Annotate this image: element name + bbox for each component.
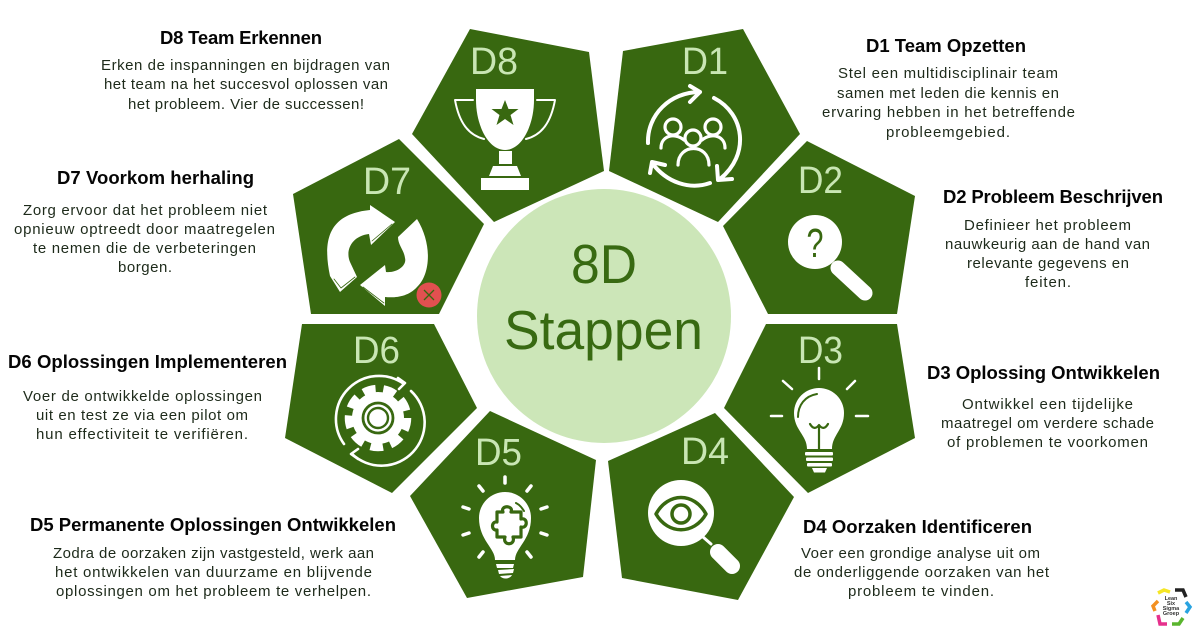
text block: D1: Stel een multidisciplinair team (838, 65, 1058, 82)
text block: D3: D3 Oplossing Ontwikkelen (927, 362, 1160, 383)
logo: Lean Six Sigma Groep: Groep (1163, 611, 1180, 617)
text block: D4: Voer een grondige analyse uit om (801, 545, 1040, 562)
icon: team in cycle (648, 86, 740, 186)
panel: D8 (412, 29, 604, 222)
icon: magnifier with question mark (788, 215, 865, 293)
text block: D3: maatregel om verdere schade (941, 415, 1154, 432)
panel: D2 (723, 141, 915, 314)
text block: D4: probleem te vinden. (848, 583, 994, 600)
panel: D1: D1 (682, 41, 728, 83)
text block: D7 (14, 167, 275, 276)
text block: D6: uit en test ze via een pilot om (36, 407, 248, 424)
text block: D1: probleemgebied. (886, 124, 1010, 141)
panel: D8: D8 (470, 41, 518, 83)
text block: D6: hun effectiviteit te verifiëren. (36, 426, 248, 443)
logo: Lean Six Sigma Groep: Sigma (1163, 606, 1180, 612)
icon: trophy (455, 89, 555, 190)
text block: D5 (30, 514, 396, 600)
text block: D8: Erken de inspanningen en bijdragen van (101, 57, 390, 74)
text block: D5: oplossingen om het probleem te verhelpen. (56, 583, 371, 600)
panel: D3: D3 (798, 330, 843, 372)
panel: D1 (609, 29, 800, 222)
icon: magnifier with eye (648, 480, 732, 566)
text block: D2: feiten. (1025, 274, 1071, 291)
text block: D1: samen met leden die kennis en (837, 85, 1059, 102)
text block: D5: het ontwikkelen van duurzame en blijvende (55, 564, 372, 581)
text block: D7: opnieuw optreedt door maatregelen (14, 221, 275, 238)
text block: D8 (101, 27, 390, 113)
panel: D4: D4 (681, 431, 729, 473)
center circle: 8D Stappen: Stappen (504, 299, 703, 361)
icon: gear with cycle arrows (336, 376, 425, 466)
panel: D6 (285, 324, 477, 493)
text block: D2: Definieer het probleem (964, 217, 1131, 234)
icon: bulb with puzzle piece (463, 477, 547, 579)
icon: red close badge (416, 282, 442, 308)
text block: D3 (927, 362, 1160, 451)
text block: D7: borgen. (118, 259, 172, 276)
text block: D2 (943, 186, 1163, 291)
text block: D3: Ontwikkel een tijdelijke (962, 396, 1133, 413)
center circle: 8D Stappen: 8D (571, 233, 637, 295)
panel: D6: D6 (353, 330, 400, 372)
text block: D4: D4 Oorzaken Identificeren (803, 516, 1032, 537)
panel: D3 (724, 324, 915, 493)
text block: D4 (794, 516, 1050, 600)
icon: magnifier with question mark: ? (806, 220, 824, 266)
text block: D1: D1 Team Opzetten (866, 35, 1026, 56)
text block: D7: D7 Voorkom herhaling (57, 167, 254, 188)
text block: D7: Zorg ervoor dat het probleem niet (23, 202, 268, 219)
logo: Lean Six Sigma Groep: Lean (1165, 596, 1178, 602)
text block: D7: te nemen die de verbeteringen (33, 240, 256, 257)
panel: D5 (410, 411, 596, 598)
text block: D8: het probleem. Vier de successen! (128, 96, 364, 113)
text block: D2: nauwkeurig aan de hand van (945, 236, 1150, 253)
icon: recycle arrows (327, 205, 428, 306)
panel: D2: D2 (798, 160, 843, 202)
text block: D8: D8 Team Erkennen (160, 27, 322, 48)
text block: D1 (822, 35, 1075, 141)
panel: D7: D7 (363, 161, 411, 203)
icon: light bulb (771, 368, 868, 472)
text block: D6: Voer de ontwikkelde oplossingen (23, 388, 262, 405)
panel: D5: D5 (475, 432, 522, 474)
text block: D5: Zodra de oorzaken zijn vastgesteld, werk aan (53, 545, 374, 562)
logo: Lean Six Sigma Groep (1153, 590, 1190, 624)
text block: D2: relevante gegevens en (967, 255, 1129, 272)
text block: D1: ervaring hebben in het betreffende (822, 104, 1075, 121)
center circle: 8D Stappen (477, 189, 731, 443)
text block: D5: D5 Permanente Oplossingen Ontwikkelen (30, 514, 396, 535)
text block: D2: D2 Probleem Beschrijven (943, 186, 1163, 207)
text block: D3: of problemen te voorkomen (947, 434, 1148, 451)
panel: D4 (608, 413, 794, 600)
text block: D6: D6 Oplossingen Implementeren (8, 351, 287, 372)
text block: D8: het team na het succesvol oplossen van (104, 76, 388, 93)
text block: D4: de onderliggende oorzaken van het (794, 564, 1050, 581)
logo: Lean Six Sigma Groep: Six (1167, 601, 1176, 607)
panel: D7 (293, 139, 484, 314)
text block: D6 (8, 351, 287, 443)
